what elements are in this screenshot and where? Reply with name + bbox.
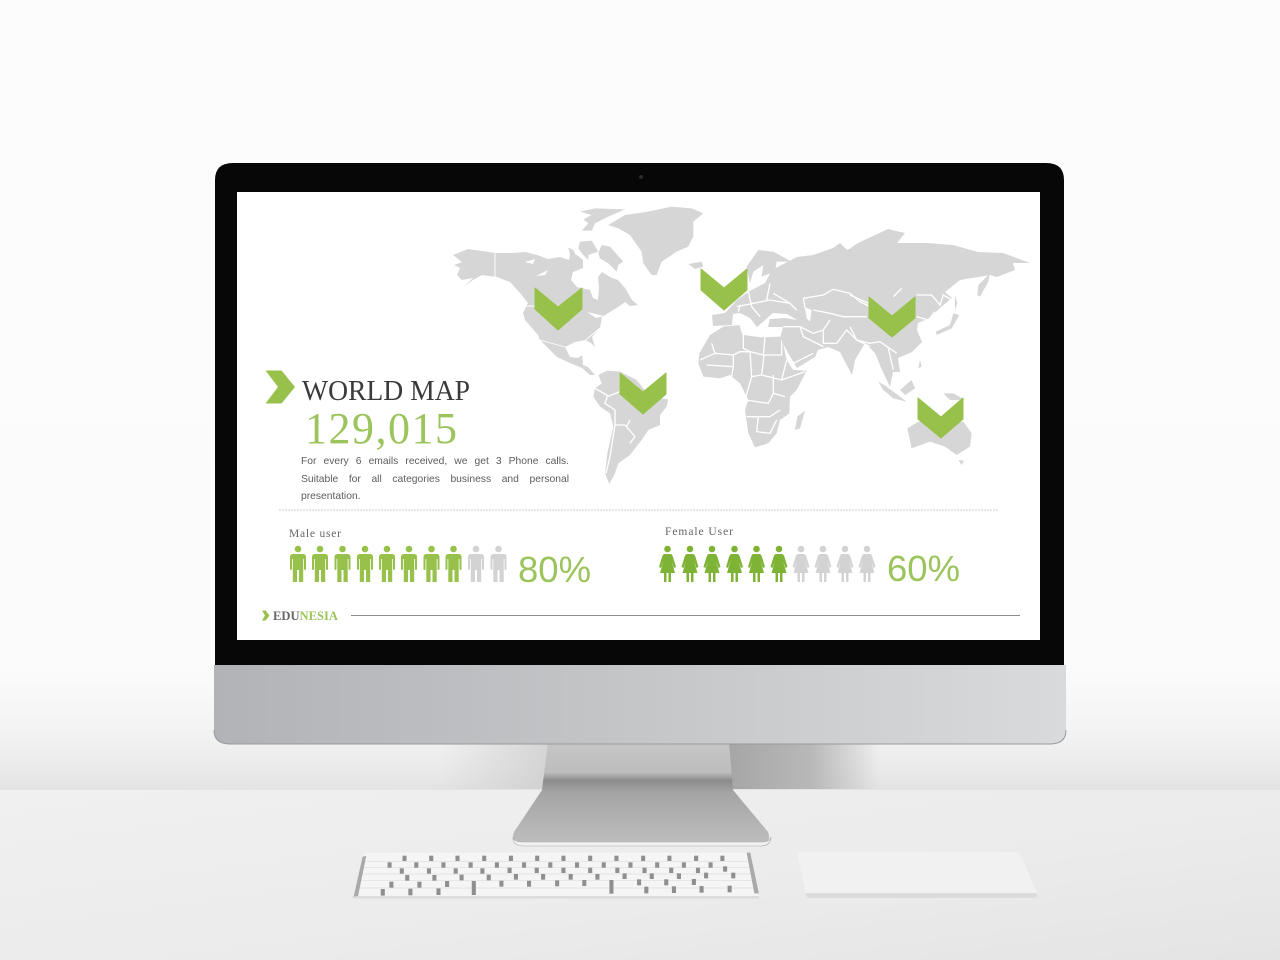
Banks [568,248,577,257]
key row 4 [405,873,735,881]
North America [453,249,638,375]
Japan [936,295,959,335]
Sakhalin [977,273,990,297]
male pictogram row: 8 of 10 [290,546,506,582]
key row 5 [389,879,696,895]
monitor chin [214,665,1066,744]
trackpad [797,852,1037,898]
Scandinavia [747,250,792,283]
key row 1 [402,856,724,861]
Greenland [608,207,703,275]
male user label: Male user [289,528,341,540]
Iceland [688,262,703,269]
key row 6 [381,886,732,896]
stand shadow [440,744,879,789]
Australia [907,422,972,455]
Eurasia [712,229,1030,387]
chevron marker: Asia [869,297,915,337]
footer chevron icon [262,610,270,620]
chevron marker: Europe [701,269,747,310]
key row 3 [400,866,727,874]
title chevron icon [266,370,295,404]
monitor bezel [215,163,1064,665]
key row 2 [388,862,713,868]
chevron marker: South America [620,373,666,414]
title: WORLD MAP [302,375,470,407]
Victoria [578,241,598,260]
monitor stand [513,742,771,846]
Caspian sea [805,307,812,322]
Tasmania [958,460,964,465]
New Guinea [943,393,965,400]
eurasia borders [737,283,870,363]
big number: 129,015 [305,404,457,453]
Asia-Pacific [850,273,990,465]
webcam [639,175,643,179]
east asia borders [850,288,952,370]
screen [237,192,1040,640]
body paragraph: For every 6 emails received, we get 3 Phone calls. [301,456,569,467]
divider [279,509,999,511]
footer brand: EDUNESIA [273,609,338,623]
body paragraph: Suitable for all categories business and personal [301,474,569,484]
south america borders [595,373,635,473]
canada border and lakes [495,253,600,347]
body paragraph: presentation. [301,491,361,502]
africa borders [700,325,805,433]
Baffin [598,245,623,272]
world map [453,207,1030,484]
keyboard frame edges [354,853,759,897]
chevron marker: Australia [918,398,963,438]
Sumatra [878,382,907,402]
body paragraph [301,456,569,502]
female percentage: 60% [887,548,960,589]
canadian lakes [525,259,604,318]
Ellesmere [580,208,625,231]
Africa [698,250,807,447]
Madagascar [795,411,805,430]
male percentage: 80% [518,549,591,590]
background: desk [0,790,1280,960]
chin lower edge [214,730,1066,744]
chevron marker: North America [535,288,582,330]
keyboard [352,852,759,898]
South America [593,371,668,484]
female pictogram row: 6 of 10 [659,546,876,582]
female user label: Female User [665,526,733,538]
keyboard row lines [357,861,757,888]
Philippines [918,360,922,368]
Borneo [900,380,915,395]
arctic and greenland group [568,207,703,275]
footer rule [351,614,1020,616]
